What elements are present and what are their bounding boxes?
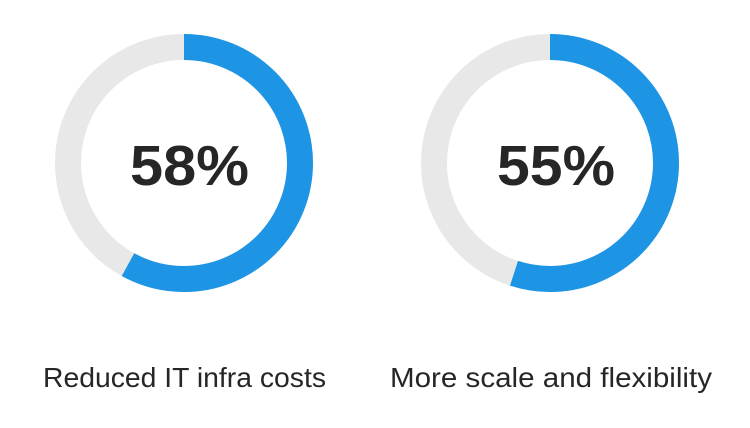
label: reduced IT infra costs: Reduced IT infra costs — [43, 362, 326, 393]
label: more scale and flexibility: More scale and flexibility — [390, 362, 712, 393]
donut chart: 58% — [68, 47, 300, 279]
donut chart: 55% — [434, 47, 666, 279]
value: 58%: 58% — [130, 134, 249, 198]
value: 55%: 55% — [497, 134, 615, 198]
